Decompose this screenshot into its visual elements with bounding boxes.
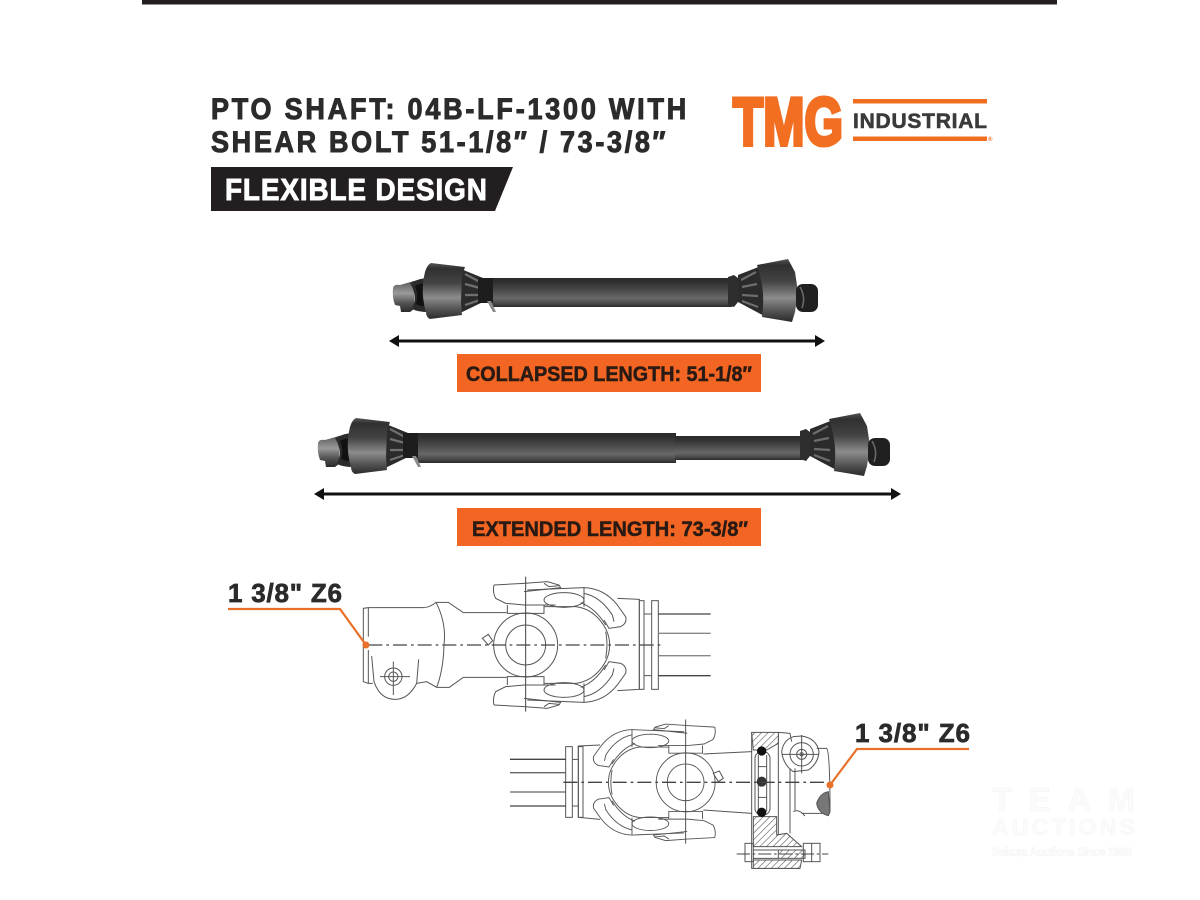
title: SHEAR BOLT 51-1/8″ / 73-3/8″ bbox=[211, 126, 666, 159]
title: PTO SHAFT: 04B-LF-1300 WITH bbox=[211, 93, 686, 126]
logo: TMG Industrial: INDUSTRIAL bbox=[853, 110, 987, 133]
label: extended length bbox=[457, 508, 761, 546]
label: extended length: EXTENDED LENGTH: 73-3/8″ bbox=[472, 518, 748, 541]
banner: flexible design bbox=[211, 167, 513, 211]
shaft: extended bbox=[318, 413, 890, 476]
title bbox=[211, 93, 686, 159]
logo: TMG Industrial: TMG bbox=[733, 84, 843, 160]
shaft: collapsed bbox=[393, 259, 818, 322]
callout: upper spline size: 1 3/8" Z6 bbox=[228, 578, 342, 608]
watermark: Team Auctions: AUCTIONS bbox=[992, 814, 1135, 840]
watermark: Team Auctions: TEAM bbox=[992, 781, 1135, 818]
callout: lower spline size bbox=[826, 718, 970, 788]
watermark: Team Auctions: Sekura Auctions Since 1966 bbox=[992, 845, 1132, 859]
banner: flexible design: FLEXIBLE DESIGN bbox=[225, 173, 487, 207]
arrow: extended length bbox=[314, 488, 901, 500]
technical drawing: upper joint bbox=[363, 577, 711, 712]
logo: TMG Industrial bbox=[733, 84, 993, 160]
top border bar bbox=[142, 0, 1057, 4]
logo: TMG Industrial: ® bbox=[988, 136, 993, 143]
callout: lower spline size: 1 3/8" Z6 bbox=[855, 718, 970, 748]
label: collapsed length bbox=[457, 354, 761, 392]
label: collapsed length: COLLAPSED LENGTH: 51-1/8″ bbox=[466, 363, 752, 386]
arrow: collapsed length bbox=[389, 335, 825, 347]
technical drawing: lower joint with shear bolt bbox=[510, 719, 830, 868]
callout: upper spline size bbox=[228, 578, 370, 648]
watermark: Team Auctions bbox=[992, 781, 1135, 859]
